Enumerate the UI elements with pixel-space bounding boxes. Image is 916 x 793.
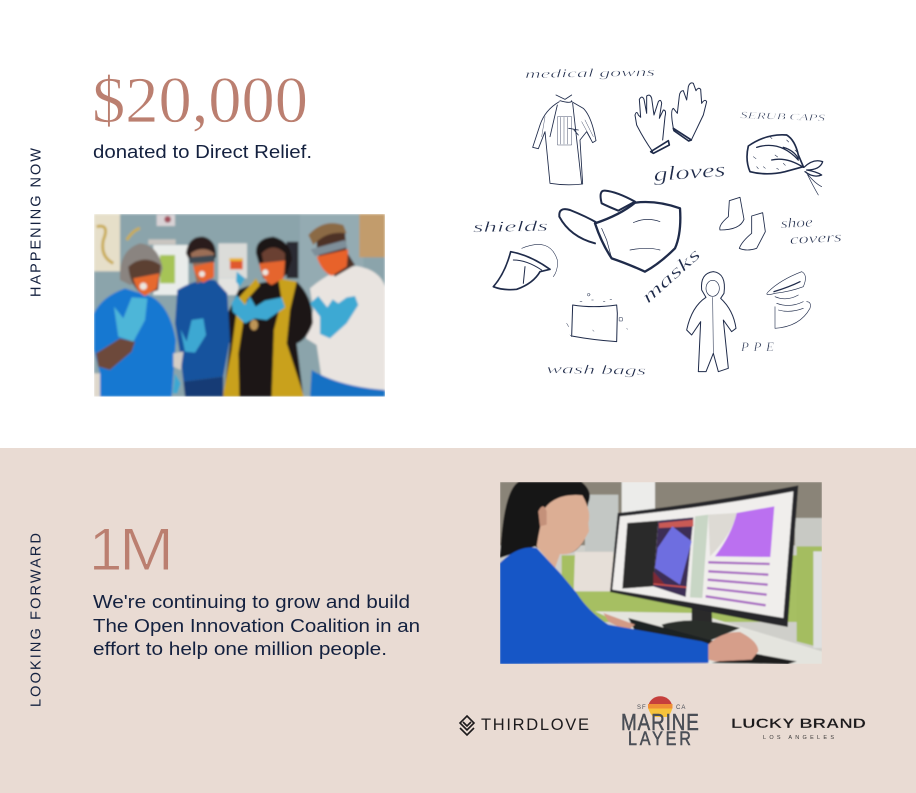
label: shoe covers: shoe: [780, 215, 813, 232]
label: gloves: gloves: [653, 159, 726, 186]
label: masks: masks: [637, 244, 704, 307]
heading: 1M: M: [119, 516, 174, 583]
logo: Lucky Brand: LUCKY BRAND: [731, 715, 866, 731]
icon: striped sun: [648, 696, 672, 717]
icon: medical gown: [533, 95, 596, 185]
icon: face shield: [493, 244, 557, 290]
heading: $20,000: $20,000: [92, 64, 308, 137]
logo: Lucky Brand: [731, 715, 866, 741]
logo: Marine Layer: MARINE: [621, 710, 699, 735]
logo: Lucky Brand: LOS ANGELES: [763, 735, 834, 741]
icon: gloves: [635, 83, 707, 153]
monitor: [610, 485, 798, 627]
text: donated to Direct Relief: donated to Direct Relief.: [93, 141, 312, 162]
photo: woman working at a curved monitor: [500, 482, 822, 664]
icon: wash bag: [567, 293, 628, 342]
logo: ThirdLove: THIRDLOVE: [481, 716, 589, 734]
panel: looking forward background: [0, 448, 916, 793]
text: coalition description: effort to help one million people.: [93, 638, 387, 659]
person 2: [175, 280, 230, 382]
icon: face mask: [559, 191, 680, 272]
label: shoe covers: covers: [789, 230, 843, 248]
icon: shoe covers: [720, 197, 765, 250]
heading: 1M: 1: [89, 516, 122, 583]
icon: ThirdLove diamond: [460, 716, 474, 735]
label: PPE: PPE: [740, 339, 774, 354]
sidebar label: happening now: HAPPENING NOW: [28, 148, 44, 297]
label: medical gowns: medical gowns: [525, 65, 656, 81]
text: coalition description: [93, 591, 420, 659]
person 3: [223, 281, 313, 397]
logo: Marine Layer: SF: [637, 705, 647, 711]
photo: healthcare workers in masks and gloves: [94, 214, 385, 397]
logo: Marine Layer: [621, 696, 699, 749]
label: shields: shields: [473, 219, 548, 236]
icon: coverall suit: [687, 272, 736, 372]
person 4: [306, 266, 385, 390]
woman: [500, 482, 590, 558]
sidebar label: looking forward: LOOKING FORWARD: [28, 533, 44, 707]
text: coalition description: We're continuing to grow and build: [93, 591, 410, 612]
text: coalition description: The Open Innovation Coalition in an: [93, 615, 420, 636]
label: wash bags: wash bags: [546, 361, 646, 378]
label: shoe covers: [780, 215, 843, 248]
label: scrub caps: SERUB CAPS: [740, 111, 826, 124]
logo: Marine Layer: LAYER: [628, 728, 691, 749]
logo: Marine Layer: CA: [676, 705, 686, 711]
icon: stacked fabric: [767, 272, 810, 328]
illustration: hand-drawn PPE sketches: [493, 83, 823, 372]
person 1: [94, 288, 176, 397]
heading: 1M: [89, 516, 174, 583]
icon: scrub cap: [747, 135, 823, 195]
